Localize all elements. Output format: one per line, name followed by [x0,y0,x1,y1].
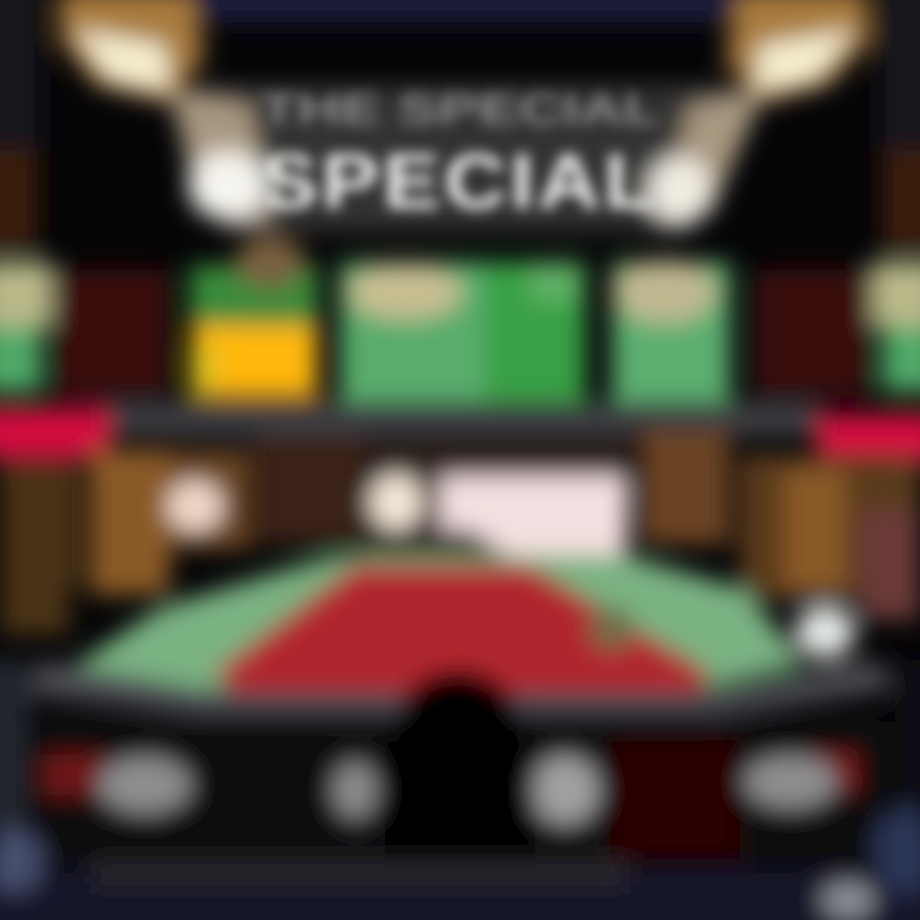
white blob one [99,757,191,813]
lower wall [0,430,920,635]
left ceiling lamp [60,0,205,105]
left wall [0,0,42,250]
red accent right [810,752,860,792]
ledge [100,402,820,436]
white table spot [795,606,855,658]
banner heading: SPECIAL [260,137,660,225]
green panel three [612,260,730,410]
left edge panel [0,262,52,392]
white blob two [333,762,377,818]
right side column [822,660,920,920]
right ceiling lamp [725,0,870,105]
banner frame [170,85,765,232]
right wall [878,0,920,250]
left side column [0,660,43,892]
top navy ceiling [190,0,740,22]
table object [590,606,634,650]
left curtain [55,270,170,395]
banner heading [260,85,660,225]
table edge [30,660,890,715]
bottom black front [40,722,880,862]
green panel two [485,262,585,410]
white cloth [440,476,628,572]
white spot centre [370,474,422,530]
dark red panel [610,738,740,860]
white blob three [531,756,599,824]
right crimson band [818,414,920,462]
right edge panel [872,262,920,392]
white spot left [167,480,223,532]
table surface [65,555,805,690]
right curtain [755,270,870,395]
left banner glow [188,151,268,219]
left crimson band [0,408,110,458]
central silhouette [385,670,535,860]
bottom floor [0,860,920,920]
banner heading: THE SPECIAL [260,85,660,134]
red accent left [40,755,105,795]
yellow panel [190,236,318,397]
red table centre [215,565,710,695]
green panel one [340,262,485,410]
right banner glow [648,156,712,224]
white blob four [744,756,836,808]
